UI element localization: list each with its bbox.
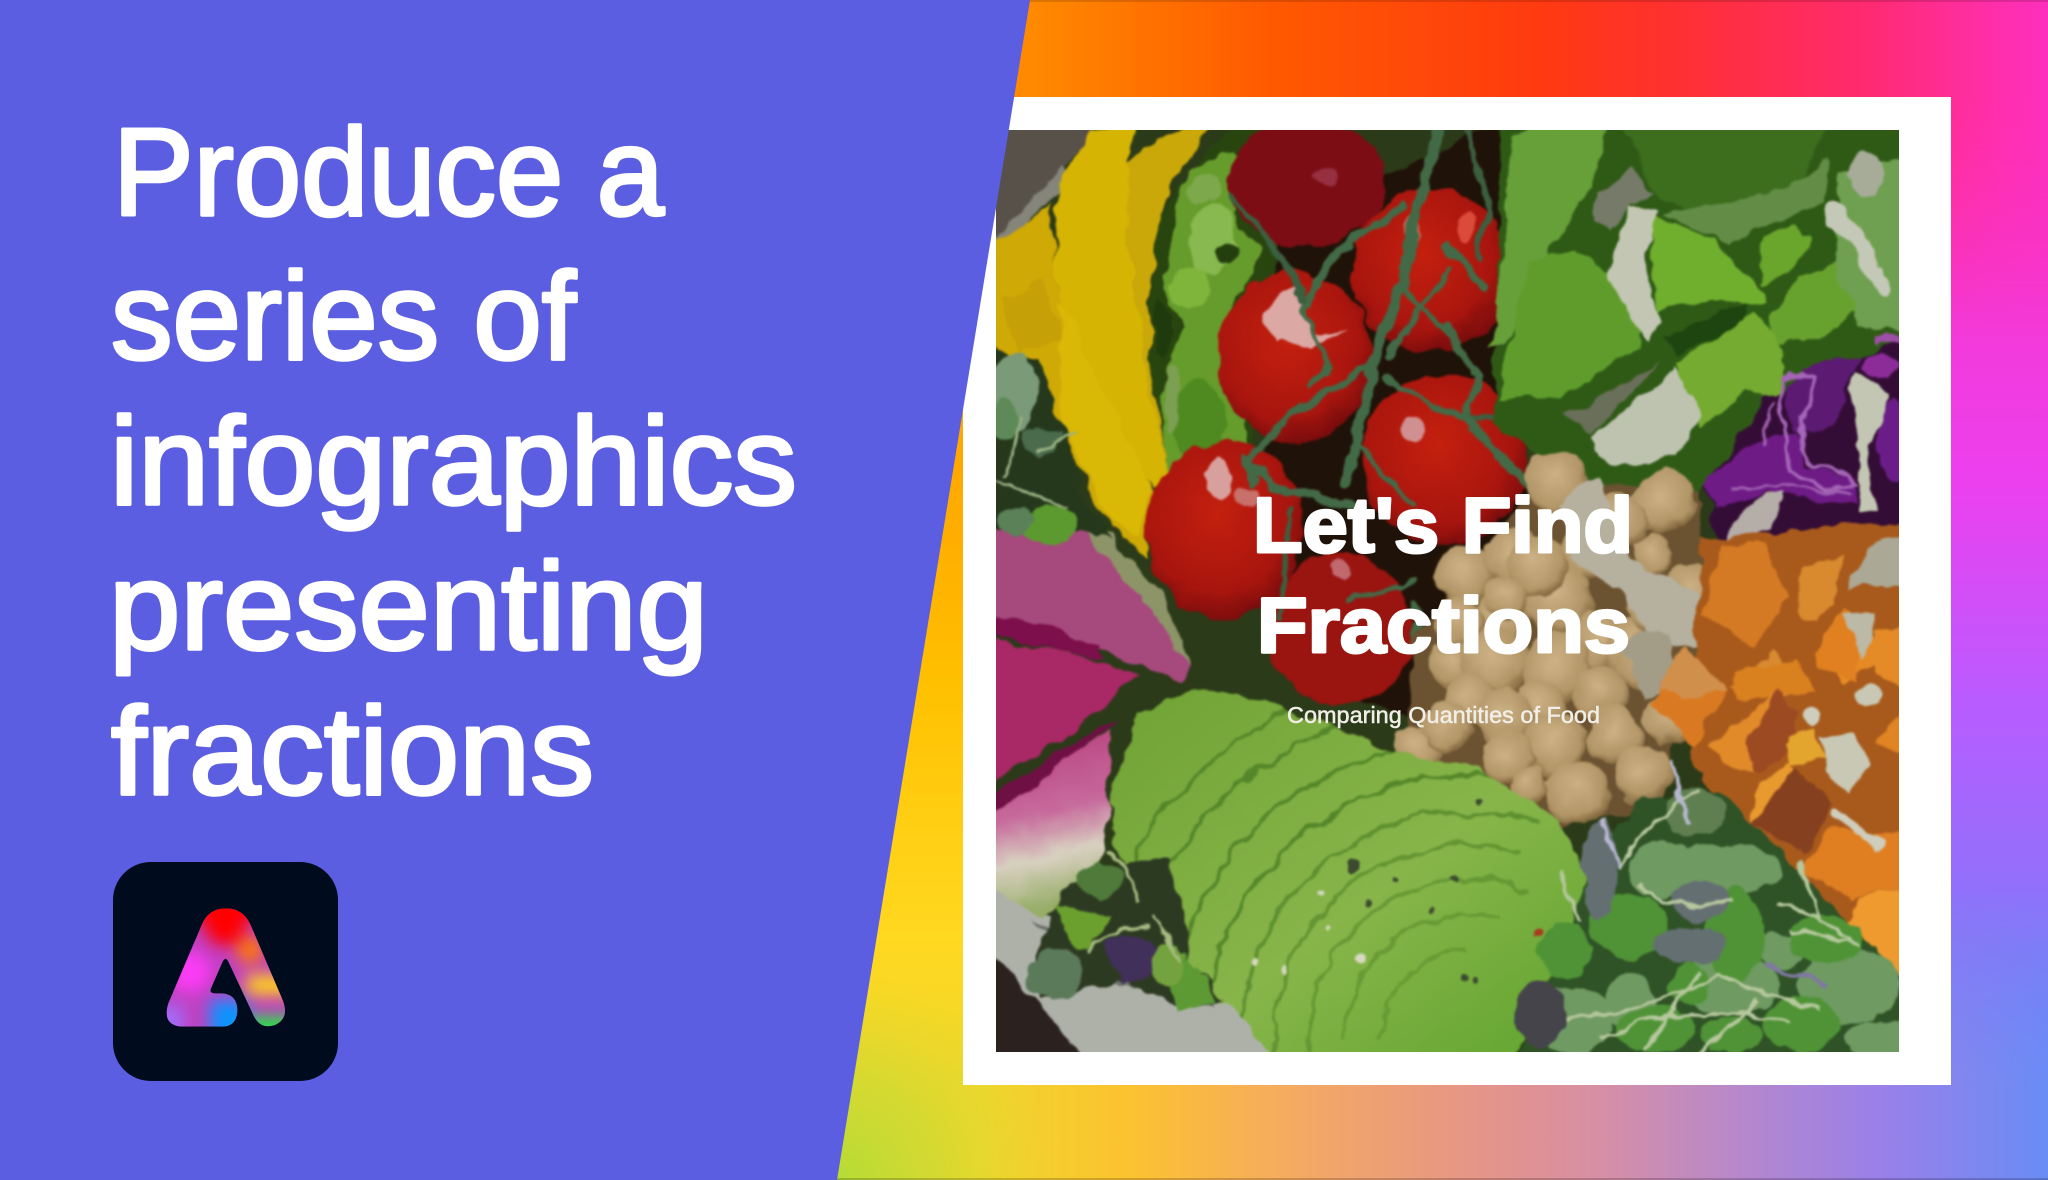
sweet potato cubes: [1652, 520, 1915, 995]
photo subtitle: Comparing Quantities of Food: [1287, 702, 1600, 728]
bottom-right microgreens: [1510, 760, 1915, 1070]
Adobe Express logo: [113, 862, 338, 1081]
top-right lettuce with dressing: [1488, 115, 1915, 500]
food photo: [975, 110, 1925, 1075]
background: rainbow gradient: [830, 0, 2048, 1180]
tomatoes and dark gaps: [1147, 115, 1530, 720]
heading: [109, 104, 797, 821]
heading: series of: [111, 248, 577, 386]
chickpeas: [1392, 450, 1705, 830]
red cabbage: [1705, 332, 1915, 552]
photo title: Let's Find Fractions: Let's Find: [1253, 481, 1633, 569]
white photo frame: [963, 97, 1951, 1085]
lettuce left of tomatoes: [1148, 130, 1276, 473]
photo title: Let's Find Fractions: [1253, 481, 1633, 669]
plate bottom-left: [996, 889, 1271, 1052]
left microgreens: [985, 345, 1110, 547]
photo title: Let's Find Fractions: Fractions: [1257, 581, 1630, 669]
plate top-left: [996, 130, 1096, 241]
avocado: [1105, 672, 1589, 1060]
tomato vine stems: [1228, 130, 1528, 640]
blue panel: [0, 0, 1030, 1180]
watermelon radish slices: [985, 520, 1195, 915]
heading: infographics: [110, 393, 797, 531]
rainbow letter A: [166, 908, 286, 1027]
yellow pepper slices: [985, 120, 1215, 555]
bottom-left microgreens: [1027, 850, 1225, 1012]
heading: Produce a: [113, 104, 664, 242]
heading: presenting: [109, 538, 708, 676]
heading: fractions: [111, 683, 594, 821]
